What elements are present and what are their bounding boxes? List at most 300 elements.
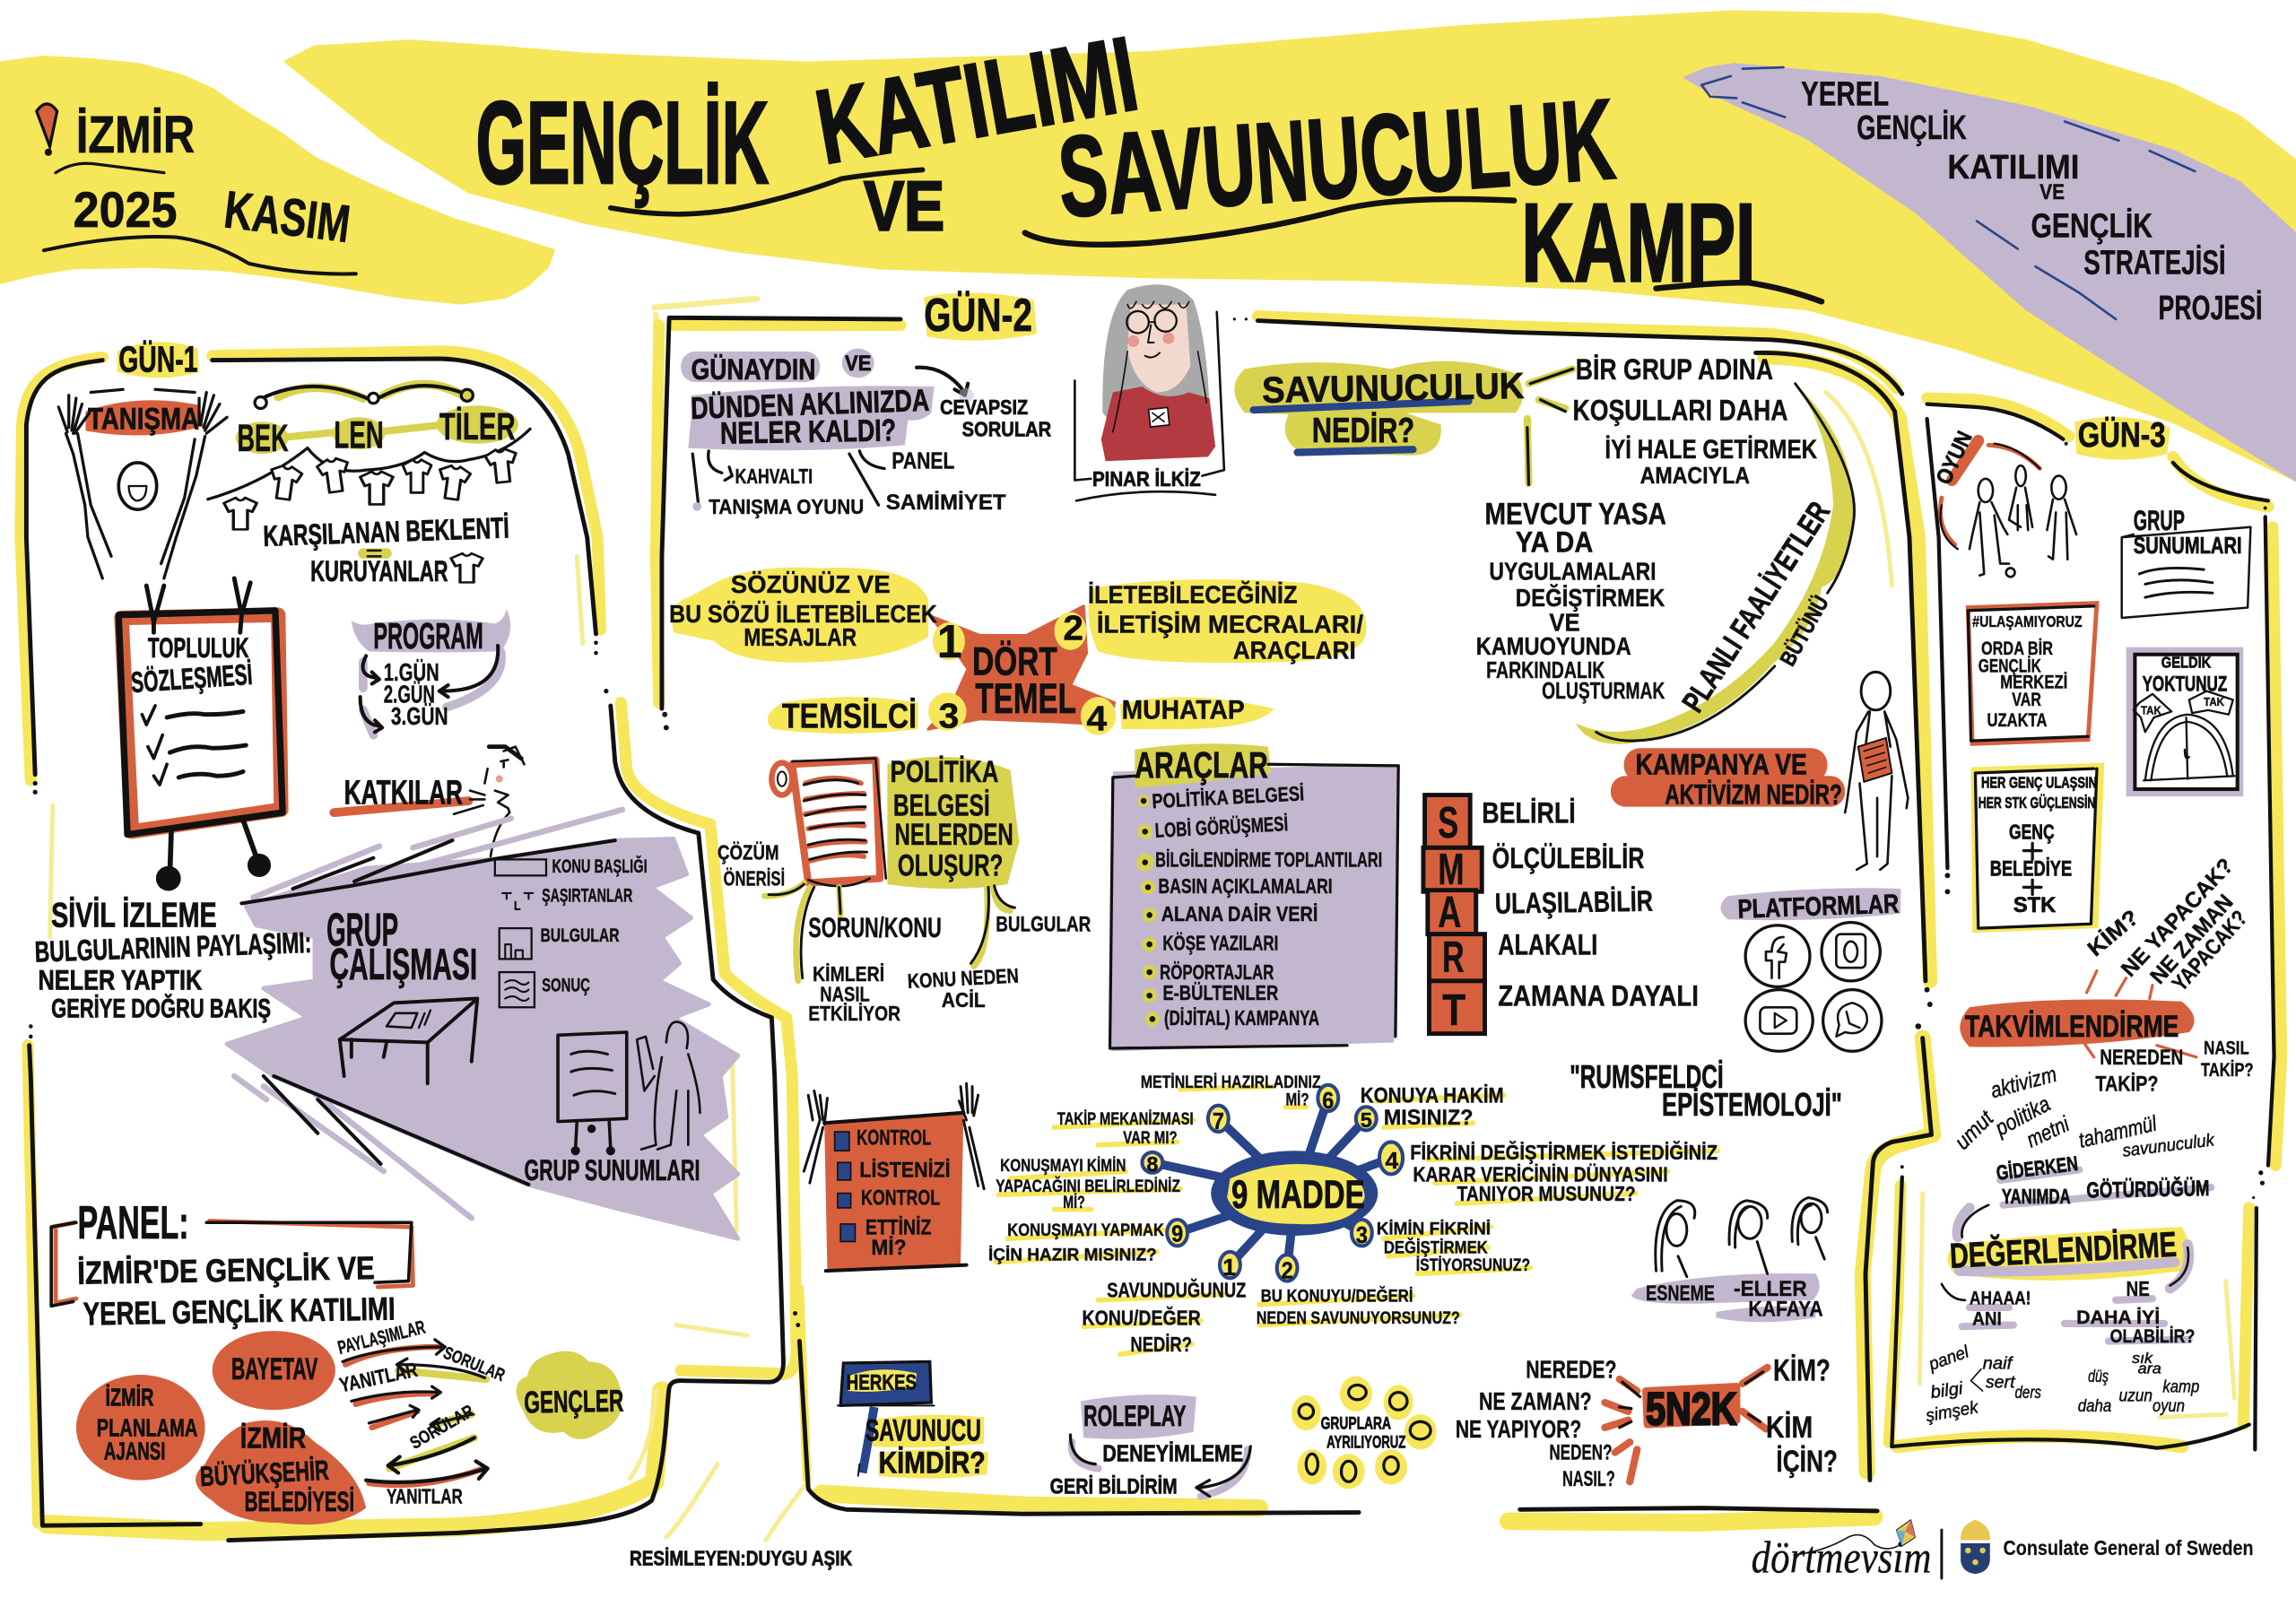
box: unreachable centre: GENÇLİK bbox=[1979, 655, 2041, 676]
section: campaign and activism: AKTİVİZM NEDİR? bbox=[1665, 778, 1842, 810]
definition text: KOŞULLARI DAHA bbox=[1572, 394, 1787, 427]
icon: instagram bbox=[1822, 923, 1880, 981]
foundation labels: ARAÇLARI bbox=[1233, 637, 1356, 665]
question labels: NE YAPIYOR? bbox=[1456, 1415, 1581, 1443]
diagonal questions bbox=[2083, 854, 2254, 1096]
arrows between institutions and youth bbox=[335, 1317, 508, 1508]
section: take-aways words: umut bbox=[1951, 1106, 1999, 1155]
list of days: 2.GÜN bbox=[384, 681, 435, 708]
heading: policy document: POLİTİKA bbox=[891, 755, 998, 789]
section: role play: GERİ BİLDİRİM bbox=[1050, 1474, 1178, 1498]
node: bayetav bbox=[213, 1331, 335, 1410]
text: good morning: GÜNAYDIN bbox=[691, 352, 815, 386]
section: platforms: PLATFORMLAR bbox=[1737, 889, 1900, 925]
icon: facebook bbox=[1745, 925, 1810, 986]
checklist squares bbox=[835, 1132, 855, 1241]
list: tools: KÖŞE YAZILARI bbox=[1162, 932, 1278, 955]
foundation labels: MUHATAP bbox=[1122, 696, 1245, 725]
heading: tools: ARAÇLAR bbox=[1135, 744, 1268, 786]
icon: speaking person bbox=[454, 747, 524, 856]
item labels: KONUYA HAKİM bbox=[1361, 1083, 1504, 1108]
list: group work outline: SONUÇ bbox=[542, 975, 590, 995]
node: planning agency: PLANLAMA bbox=[97, 1414, 197, 1442]
project text: GENÇLİK bbox=[1857, 109, 1967, 146]
section: who advocates: KİMDİR? bbox=[879, 1446, 986, 1480]
list of days: 1.GÜN bbox=[384, 658, 439, 686]
panel: tools bbox=[1110, 743, 1400, 1051]
numbers: 2 bbox=[1063, 609, 1083, 647]
section: morning recap: SAMİMİYET bbox=[886, 491, 1006, 515]
panel: group work: ÇALIŞMASI bbox=[329, 941, 477, 989]
item labels: KONU/DEĞER bbox=[1083, 1307, 1201, 1330]
checklist text: Mİ? bbox=[871, 1236, 907, 1260]
definition text bbox=[1572, 352, 1817, 489]
question labels: NEDEN? bbox=[1549, 1441, 1613, 1465]
node: youth: GENÇLER bbox=[524, 1385, 624, 1420]
section: role play bbox=[1050, 1394, 1250, 1498]
text: civic monitoring findings: GERİYE DOĞRU BAKIŞ bbox=[51, 994, 271, 1024]
definition text: AMACIYLA bbox=[1640, 462, 1750, 489]
handwritten notes: naif bbox=[1983, 1354, 2014, 1374]
heading: policy document bbox=[891, 755, 1013, 882]
item labels: FİKRİNİ DEĞİŞTİRMEK İSTEDİĞİNİZ bbox=[1410, 1141, 1718, 1164]
icon: crown and shield bbox=[1961, 1520, 1990, 1574]
smart words: ÖLÇÜLEBİLİR bbox=[1492, 841, 1644, 874]
icon: exclamation mark bbox=[37, 104, 57, 156]
section: morning recap: TANIŞMA OYUNU bbox=[709, 495, 864, 518]
handwritten notes: düş bbox=[2088, 1367, 2109, 1386]
list: goals: DEĞİŞTİRMEK bbox=[1516, 584, 1665, 612]
section: take-aways words: tahammül bbox=[2076, 1112, 2160, 1153]
icon: three figures bbox=[1970, 465, 2076, 577]
foundation labels: TEMSİLCİ bbox=[782, 697, 917, 735]
document parts: ETKİLİYOR bbox=[808, 1002, 901, 1025]
heading: 5N2K: 5N2K bbox=[1646, 1384, 1737, 1435]
question labels: KİM bbox=[1766, 1411, 1813, 1445]
heading: scheduling: TAKVİMLENDİRME bbox=[1965, 1010, 2179, 1044]
icon: whatsapp bbox=[1823, 990, 1882, 1051]
section: morning recap: SORULAR bbox=[962, 418, 1052, 441]
section: morning recap: CEVAPSIZ bbox=[940, 395, 1028, 419]
box: unreachable centre: MERKEZİ bbox=[2000, 671, 2067, 692]
outcome labels: ANI bbox=[1972, 1309, 2002, 1330]
question labels bbox=[1456, 1354, 1838, 1491]
handwritten notes bbox=[1925, 1342, 2199, 1426]
smart words: BELİRLİ bbox=[1482, 796, 1576, 830]
handwritten notes: kamp bbox=[2162, 1377, 2199, 1397]
section: smart goals: T bbox=[1442, 986, 1465, 1035]
section: morning recap: DÜNDEN AKLINIZDA bbox=[691, 383, 930, 426]
document parts: ÖNERİSİ bbox=[724, 867, 785, 890]
heading: savunuculuk nedir: SAVUNUCULUK bbox=[1262, 365, 1525, 411]
document parts bbox=[718, 840, 1091, 1025]
box: every young person bbox=[1974, 766, 2101, 930]
icon: kite bbox=[1896, 1520, 1916, 1546]
box: you were not there: GELDİK bbox=[2161, 653, 2211, 671]
checklist text: KONTROL bbox=[857, 1126, 931, 1151]
question labels: NASIL? bbox=[1562, 1467, 1615, 1491]
box: unreachable centre: UZAKTA bbox=[1987, 710, 2047, 731]
section: take-aways words: savunuculuk bbox=[2121, 1130, 2216, 1161]
icon: video bbox=[1745, 990, 1813, 1051]
list: group work outline bbox=[495, 855, 648, 1007]
year: 2025 bbox=[74, 182, 178, 238]
panel: group work bbox=[227, 810, 738, 1238]
node: planning agency: İZMİR bbox=[106, 1383, 153, 1411]
text: civic monitoring findings: NELER YAPTIK bbox=[38, 965, 203, 996]
icon: presentation board bbox=[558, 1032, 627, 1154]
section: morning recap: VE bbox=[845, 352, 871, 376]
item labels: KONUŞMAYI KİMİN bbox=[1000, 1155, 1126, 1176]
heading: four foundations: DÖRT bbox=[972, 640, 1057, 684]
text: civic monitoring findings bbox=[34, 896, 312, 1024]
node: metropolitan municipality bbox=[196, 1420, 366, 1524]
word: bek len tiler: TİLER bbox=[439, 405, 516, 447]
section: scheduling bbox=[1960, 854, 2254, 1096]
project text: YEREL bbox=[1801, 75, 1889, 113]
outcome labels: OLABİLİR? bbox=[2110, 1325, 2195, 1347]
box: every young person: BELEDİYE bbox=[1990, 856, 2072, 881]
diagonal questions: TAKİP? bbox=[2095, 1072, 2159, 1096]
section: morning recap: NELER KALDI? bbox=[720, 413, 896, 451]
list of days: 3.GÜN bbox=[391, 702, 448, 730]
heading: policy document: NELERDEN bbox=[895, 818, 1013, 852]
smart words bbox=[1482, 796, 1699, 1012]
section: programme bbox=[352, 609, 510, 735]
icon: clothes line with t-shirts bbox=[208, 429, 530, 529]
diagonal questions: NE ZAMAN bbox=[2146, 890, 2239, 989]
icon: heads bbox=[1656, 1198, 1828, 1277]
section: nine items: 8 bbox=[1146, 1152, 1158, 1176]
question labels: İÇİN? bbox=[1776, 1445, 1838, 1479]
list: tools: BİLGİLENDİRME TOPLANTILARI bbox=[1155, 848, 1382, 872]
box: you were not there: TAK bbox=[2204, 695, 2224, 708]
text: civic monitoring findings: SİVİL İZLEME bbox=[51, 896, 217, 934]
list: goals: YA DA bbox=[1516, 526, 1593, 559]
outcome labels: AHAAA! bbox=[1970, 1289, 2031, 1309]
node: planning agency bbox=[76, 1375, 205, 1481]
section: break into groups bbox=[1292, 1377, 1437, 1489]
outcome labels: DAHA İYİ bbox=[2076, 1307, 2160, 1328]
foundation labels: MESAJLAR bbox=[744, 623, 857, 651]
list: group work outline: ŞAŞIRTANLAR bbox=[542, 886, 632, 907]
section: campaign and activism bbox=[1611, 672, 1908, 870]
foundation labels bbox=[669, 570, 1363, 735]
item labels: NEDİR? bbox=[1130, 1333, 1192, 1356]
labels: ESNEME bbox=[1646, 1281, 1715, 1306]
quote: Rumsfeldci epistemoloji: "RUMSFELDCİ bbox=[1570, 1058, 1724, 1095]
section: policy document bbox=[718, 755, 1091, 1025]
item labels: METİNLERİ HAZIRLADINIZ bbox=[1141, 1072, 1321, 1092]
diagonal questions: NE YAPACAK? bbox=[2117, 854, 2239, 982]
heading: role play: ROLEPLAY bbox=[1083, 1399, 1187, 1432]
section: panel bbox=[51, 1197, 624, 1524]
diagonal questions: NEREDEN bbox=[2100, 1046, 2183, 1070]
node: youth bbox=[516, 1351, 624, 1439]
credit: illustrator: RESİMLEYEN:DUYGU AŞIK bbox=[630, 1546, 853, 1569]
item labels: KARAR VERİCİNİN DÜNYASINI bbox=[1413, 1163, 1668, 1186]
section: nine items: 4 bbox=[1385, 1147, 1399, 1174]
quote: Rumsfeldci epistemoloji bbox=[1570, 1058, 1842, 1123]
handwritten notes: oyun bbox=[2152, 1396, 2185, 1416]
label: katkılar: KATKILAR bbox=[344, 773, 463, 811]
section: group presentations board: GRUP bbox=[2134, 505, 2185, 536]
diagonal questions: KİM? bbox=[2083, 906, 2144, 961]
hub text: 9 MADDE bbox=[1231, 1173, 1365, 1217]
arc: planned activities: BÜTÜNÜ bbox=[1776, 592, 1834, 670]
heading: evaluation: DEĞERLENDİRME bbox=[1949, 1225, 2178, 1276]
title line: Kampı: KAMPI bbox=[1521, 181, 1756, 305]
box: every young person: HER STK GÜÇLENSİN bbox=[1979, 794, 2095, 812]
list: tools: E-BÜLTENLER bbox=[1162, 981, 1279, 1004]
smart words: ZAMANA DAYALI bbox=[1498, 979, 1699, 1012]
logo: Dört Mevsim: dörtmevsim bbox=[1752, 1532, 1931, 1582]
box: unreachable centre: ORDA BİR bbox=[1981, 638, 2053, 659]
list: group work outline: KONU BAŞLIĞI bbox=[552, 855, 648, 877]
text: topluluk sözleşmesi: TOPLULUK bbox=[148, 632, 249, 664]
frame: day 2 bbox=[655, 299, 1933, 1523]
section: take-aways words: politika bbox=[1991, 1092, 2055, 1142]
panel: project name bbox=[1685, 65, 2296, 481]
list of days bbox=[384, 658, 448, 730]
section: group presentations board bbox=[2122, 505, 2250, 618]
item labels: İSTİYORSUNUZ? bbox=[1416, 1255, 1530, 1275]
node: bayetav: BAYETAV bbox=[231, 1352, 317, 1386]
word: bek len tiler bbox=[237, 405, 516, 459]
section: smart goals: S bbox=[1438, 799, 1458, 847]
outcome labels: NE bbox=[2126, 1277, 2150, 1300]
document parts: SORUN/KONU bbox=[808, 912, 942, 943]
checklist text bbox=[857, 1126, 951, 1260]
node: planning agency: AJANSI bbox=[104, 1438, 165, 1465]
title line: ve: VE bbox=[864, 166, 944, 245]
word: bek len tiler: LEN bbox=[334, 414, 384, 456]
heading: policy document: BELGESİ bbox=[893, 788, 990, 822]
handwritten notes: sık bbox=[2132, 1351, 2153, 1367]
numbers bbox=[937, 609, 1107, 739]
section: nine items: 2 bbox=[1282, 1256, 1293, 1283]
frame: day 1 bbox=[21, 352, 810, 1541]
box: unreachable centre: #ULAŞAMIYORUZ bbox=[1972, 612, 2083, 630]
section: take-aways words: aktivizm bbox=[1988, 1063, 2059, 1103]
letter boxes bbox=[1423, 795, 1485, 1034]
sign text: HERKES bbox=[847, 1370, 917, 1394]
arrows between institutions and youth: PAYLAŞIMLAR bbox=[335, 1317, 428, 1359]
section: nine items bbox=[988, 1072, 1718, 1356]
list: tools: POLİTİKA BELGESİ bbox=[1152, 781, 1305, 812]
board: community agreement: SÖZLEŞMESİ bbox=[130, 657, 254, 699]
section: expectations bbox=[208, 385, 530, 587]
section: break into groups: AYRILIYORUZ bbox=[1326, 1433, 1405, 1453]
section: morning recap: PANEL bbox=[891, 447, 955, 473]
section: morning recap bbox=[681, 349, 1052, 518]
list: goals: VE bbox=[1549, 609, 1580, 637]
arrows between institutions and youth: YANITLAR bbox=[337, 1358, 420, 1397]
item labels: DEĞİŞTİRMEK bbox=[1384, 1237, 1488, 1258]
box: unreachable centre: VAR bbox=[2012, 690, 2041, 710]
rays bbox=[1605, 1368, 1768, 1481]
sponsor name: Consulate General of Sweden bbox=[2003, 1536, 2254, 1559]
diagonal questions: TAKİP? bbox=[2201, 1059, 2254, 1081]
icon: smiling head bbox=[118, 463, 157, 509]
document parts: KONU NEDEN bbox=[907, 964, 1019, 993]
list: tools: ALANA DAİR VERİ bbox=[1161, 902, 1318, 925]
item labels bbox=[988, 1072, 1718, 1356]
document parts: ACİL bbox=[942, 988, 986, 1012]
section: group presentations board: SUNUMLARI bbox=[2134, 532, 2242, 559]
diagonal questions: YAPACAK? bbox=[2168, 906, 2252, 996]
heading: policy document: OLUŞUR? bbox=[898, 848, 1003, 882]
icon: presenter bbox=[637, 1021, 700, 1150]
word: bek len tiler: BEK bbox=[237, 417, 289, 459]
project text: STRATEJİSİ bbox=[2083, 243, 2226, 281]
list: goals: OLUŞTURMAK bbox=[1542, 677, 1665, 704]
label: oyun: OYUN bbox=[1932, 428, 1978, 489]
heading: day 2: GÜN-2 bbox=[924, 290, 1032, 342]
section: take-aways words: GÖTÜRDÜĞÜM bbox=[2086, 1176, 2210, 1203]
section: four foundations bbox=[669, 568, 1366, 739]
portrait: Pınar İlkiz bbox=[1074, 284, 1224, 500]
checklist marks bbox=[142, 706, 246, 785]
frame: day 3 bbox=[1889, 398, 2282, 1449]
document parts: BULGULAR bbox=[996, 912, 1091, 936]
section: nine items: 7 bbox=[1213, 1108, 1224, 1134]
handwritten notes: şimşek bbox=[1925, 1397, 1980, 1426]
labels: KAFAYA bbox=[1748, 1298, 1823, 1322]
logo: Consulate General of Sweden bbox=[1961, 1520, 2254, 1574]
checklist text: KONTROL bbox=[861, 1186, 940, 1211]
foundation labels: BU SÖZÜ İLETEBİLECEK bbox=[669, 600, 937, 628]
node: metropolitan municipality: İZMİR bbox=[240, 1421, 306, 1455]
section: what is advocacy bbox=[1234, 352, 1817, 704]
list: goals: UYGULAMALARI bbox=[1489, 558, 1657, 586]
section: yawning heads bbox=[1631, 1198, 1828, 1322]
item labels: YAPACAĞINI BELİRLEDİNİZ bbox=[996, 1175, 1180, 1196]
caption: Pınar İlkiz: PINAR İLKİZ bbox=[1092, 467, 1201, 491]
handwritten notes: ders bbox=[2015, 1383, 2041, 1403]
section: take-aways words: GİDERKEN bbox=[1995, 1151, 2079, 1185]
checklist text: ETTİNİZ bbox=[865, 1215, 931, 1239]
box: every young person: HER GENÇ ULAŞSIN bbox=[1981, 773, 2097, 791]
section: smart goals: M bbox=[1438, 846, 1465, 894]
section: morning recap: KAHVALTI bbox=[735, 465, 813, 488]
arrows between institutions and youth: SORULAR bbox=[440, 1343, 508, 1385]
numbers: 1 bbox=[937, 616, 962, 668]
item labels: VAR MI? bbox=[1123, 1128, 1178, 1148]
section: expectations: KURUYANLAR bbox=[310, 554, 448, 587]
section: take-aways words: metni bbox=[2023, 1112, 2074, 1152]
smart words: ULAŞILABİLİR bbox=[1494, 884, 1653, 920]
checklist text: LİSTENİZİ bbox=[859, 1159, 951, 1183]
item labels: KİMİN FİKRİNİ bbox=[1377, 1218, 1491, 1238]
section: panel: YEREL GENÇLİK KATILIMI bbox=[83, 1290, 396, 1333]
project text bbox=[1801, 75, 2262, 326]
numbers: 4 bbox=[1086, 700, 1107, 739]
section: game bbox=[1932, 428, 2076, 577]
heading: day 3: GÜN-3 bbox=[2078, 416, 2166, 455]
icon: coins bbox=[1292, 1377, 1437, 1489]
label: GRUPLARA bbox=[1321, 1413, 1391, 1433]
section: what is advocacy: NEDİR? bbox=[1312, 412, 1414, 450]
board: community agreement bbox=[118, 578, 283, 890]
list: tools: RÖPORTAJLAR bbox=[1160, 960, 1274, 984]
list: tools: LOBİ GÖRÜŞMESİ bbox=[1154, 812, 1289, 842]
title line: Gençlik: GENÇLİK bbox=[476, 77, 769, 208]
yellow underlines bbox=[996, 1086, 1718, 1354]
list: group work outline: BULGULAR bbox=[540, 925, 620, 946]
banner: main title bbox=[285, 12, 2296, 481]
question labels: KİM? bbox=[1773, 1354, 1831, 1388]
hub with spokes bbox=[1152, 1098, 1391, 1268]
item labels: SAVUNDUĞUNUZ bbox=[1107, 1279, 1246, 1302]
section: take-aways words: YANIMDA bbox=[2002, 1185, 2071, 1208]
section: nine items: 5 bbox=[1361, 1108, 1372, 1132]
heading: panel: PANEL: bbox=[78, 1197, 189, 1249]
label: group presentations: GRUP SUNUMLARI bbox=[524, 1153, 700, 1186]
handwritten notes: ara bbox=[2138, 1360, 2161, 1377]
divider: logos bbox=[1941, 1530, 1943, 1578]
icon: door with knocking bbox=[2134, 691, 2234, 780]
diagonal questions: NASIL bbox=[2204, 1038, 2249, 1059]
arc: planned activities bbox=[1576, 384, 1854, 744]
icon: scroll bbox=[771, 759, 886, 886]
list: tools: BASIN AÇIKLAMALARI bbox=[1158, 874, 1333, 898]
section: take-aways words bbox=[1951, 1063, 2216, 1208]
document parts: ÇÖZÜM bbox=[718, 840, 779, 864]
box: you were not there: YOKTUNUZ bbox=[2143, 673, 2227, 697]
item labels: Mİ? bbox=[1063, 1192, 1085, 1212]
box: you were not there bbox=[2126, 647, 2243, 796]
heading: day 1 bbox=[117, 339, 199, 380]
section: 5W2H bbox=[1456, 1354, 1838, 1491]
labels bbox=[1646, 1277, 1823, 1322]
section: who advocates: SAVUNUCU bbox=[865, 1414, 981, 1448]
list: goals: MEVCUT YASA bbox=[1485, 497, 1666, 531]
heading: program: PROGRAM bbox=[373, 615, 483, 656]
outcome labels bbox=[1970, 1277, 2195, 1347]
box: every young person: STK bbox=[2013, 893, 2057, 917]
numbers: 3 bbox=[939, 697, 959, 735]
arrow: to unanswered questions bbox=[917, 368, 968, 395]
list: tools: (DİJİTAL) KAMPANYA bbox=[1164, 1006, 1319, 1029]
node: metropolitan municipality: BÜYÜKŞEHİR bbox=[199, 1455, 330, 1492]
item labels: BU KONUYU/DEĞERİ bbox=[1261, 1284, 1413, 1306]
document parts: KİMLERİ bbox=[813, 962, 884, 986]
handwritten notes: uzun bbox=[2118, 1385, 2152, 1405]
definition text: İYİ HALE GETİRMEK bbox=[1605, 435, 1817, 465]
text: met expectations: KARŞILANAN BEKLENTİ bbox=[263, 510, 509, 552]
panel topic: İZMİR'DE GENÇLİK VE bbox=[77, 1249, 375, 1291]
label: tanışma: TANIŞMA bbox=[88, 402, 199, 436]
section: nine items: 3 bbox=[1356, 1221, 1368, 1248]
month: KASIM bbox=[222, 180, 353, 254]
item labels: TANIYOR MUSUNUZ? bbox=[1457, 1182, 1636, 1205]
list: goals: KAMUOYUNDA bbox=[1476, 632, 1631, 660]
item labels: KONUŞMAYI YAPMAK bbox=[1007, 1220, 1164, 1240]
handwritten notes: bilgi bbox=[1929, 1378, 1964, 1403]
node: metropolitan municipality: BELEDİYESİ bbox=[245, 1486, 354, 1517]
heading: group work: GRUP bbox=[326, 905, 398, 957]
icon: person with bag bbox=[1845, 672, 1908, 870]
title line: Savunuculuk: SAVUNUCULUK bbox=[1055, 75, 1618, 241]
project text: KATILIMI bbox=[1947, 148, 2079, 186]
list: goals: FARKINDALIK bbox=[1486, 656, 1605, 683]
item labels: TAKİP MEKANİZMASI bbox=[1057, 1108, 1194, 1129]
section: evaluation bbox=[1925, 1205, 2199, 1426]
arrows between institutions and youth: SORULAR bbox=[407, 1401, 477, 1454]
foundation labels: İLETEBİLECEĞİNİZ bbox=[1088, 581, 1298, 609]
quote: Rumsfeldci epistemoloji: EPİSTEMOLOJİ" bbox=[1662, 1086, 1842, 1123]
